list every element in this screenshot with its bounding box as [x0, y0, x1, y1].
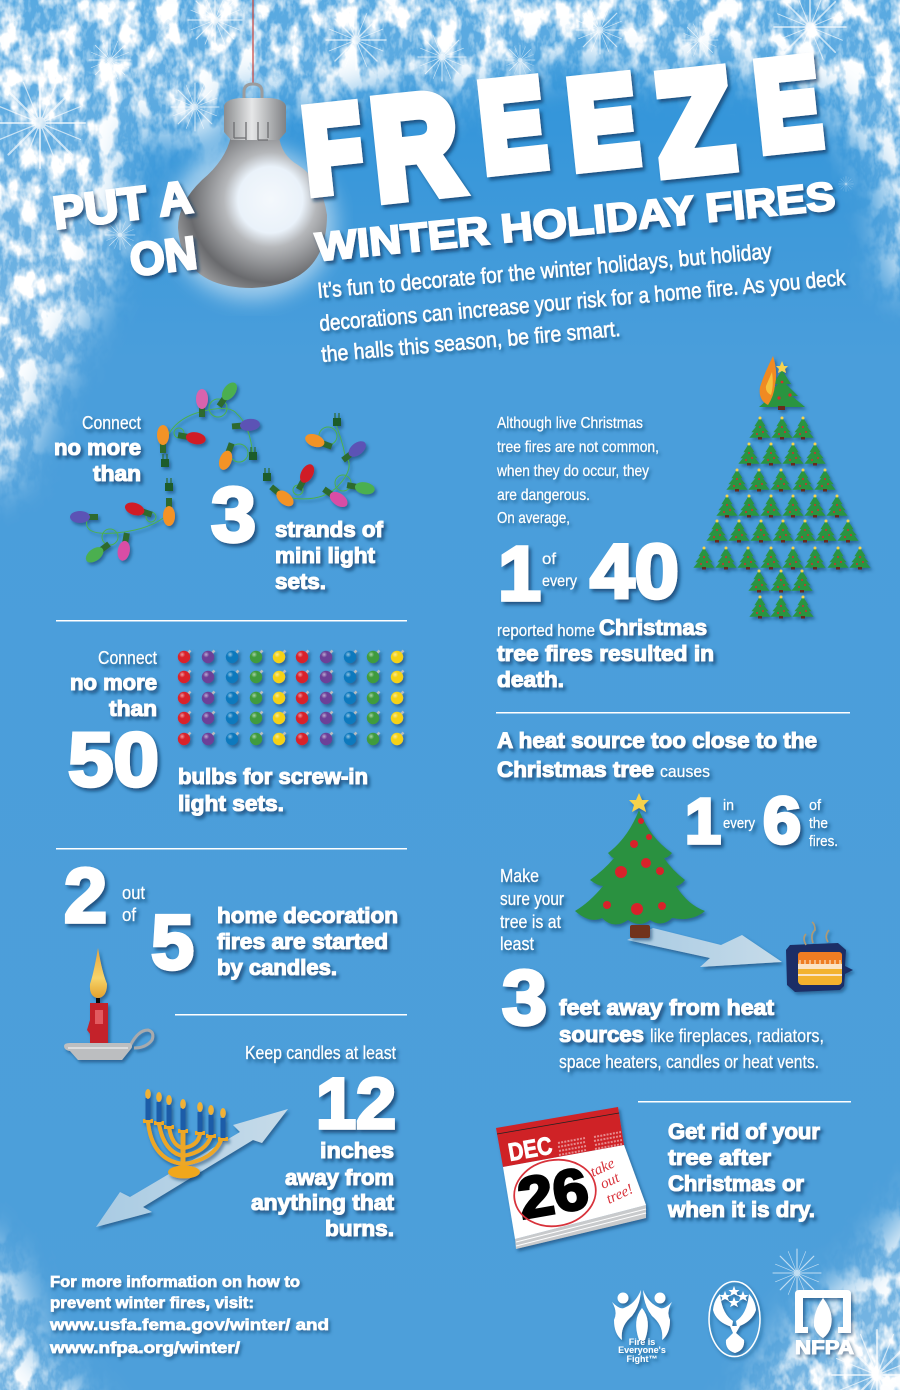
text: make sure 3 feet: Make	[500, 866, 539, 886]
text: 2 out of 5: by candles.	[217, 955, 337, 980]
text: 2 out of 5: 5	[151, 900, 194, 986]
icon: calendar dec 26: take	[588, 1155, 618, 1181]
text: 1 of every 40: every	[542, 573, 577, 590]
logo: nfpa	[795, 1290, 854, 1359]
text: connect no more than 50 bulbs: light sets.	[178, 791, 284, 816]
logo: fire is everyone's fight: Everyone's	[618, 1345, 666, 1355]
logo: fire is everyone's fight	[612, 1290, 672, 1364]
title: winter holiday fires: WINTER HOLIDAY FIRES	[314, 174, 837, 270]
text: 1 in every 6 of the fires: fires.	[809, 833, 838, 850]
text: keep candles 12 inches: burns.	[325, 1216, 394, 1241]
icon: calendar dec 26: out	[598, 1170, 623, 1193]
text: 1 in every 6 of the fires: in	[723, 797, 734, 814]
title: freeze: E	[749, 33, 826, 177]
logo: nfpa: NFPA	[795, 1338, 854, 1359]
arrow: double arrow 12 inches	[96, 1109, 288, 1227]
icon: mini light strands	[70, 380, 376, 566]
logo: fire is everyone's fight: Fight™	[626, 1354, 658, 1364]
title: freeze: F	[298, 81, 368, 218]
text: keep candles 12 inches	[245, 1043, 396, 1241]
text: get rid of your tree: Christmas or	[668, 1171, 804, 1196]
text: heat source heading: causes	[660, 762, 710, 781]
text: 1 of every 40	[497, 529, 714, 692]
icon: calendar dec 26: 26	[513, 1156, 593, 1232]
ornament	[168, 0, 336, 300]
text: 1 in every 6 of the fires: every	[723, 815, 755, 832]
text: make sure 3 feet: space heaters, candles or heat vents.	[559, 1052, 819, 1072]
text: connect no more than 50 bulbs: bulbs for screw-in	[178, 764, 368, 789]
intro text: the halls this season, be fire smart.	[320, 316, 621, 367]
title: freeze: R	[365, 63, 466, 229]
icon: calendar dec 26	[496, 1107, 646, 1249]
text: 2 out of 5: 2	[64, 853, 107, 939]
text: get rid of your tree	[667, 1119, 820, 1222]
text: 2 out of 5: of	[122, 905, 137, 925]
text: connect no more than 50 bulbs: Connect	[98, 648, 157, 668]
text: 2 out of 5: out	[122, 883, 145, 903]
text: heat source heading	[497, 728, 817, 782]
text: keep candles 12 inches: 12	[316, 1065, 396, 1144]
icon: christmas tree	[575, 793, 705, 938]
text: keep candles 12 inches: anything that	[251, 1190, 395, 1215]
text: make sure 3 feet: like fireplaces, radiators,	[650, 1026, 824, 1046]
title: freeze: E	[562, 50, 643, 194]
footer text: www.usfa.fema.gov/winter/ and	[49, 1317, 329, 1334]
text: connect no more than 3 strands: mini light	[275, 543, 376, 568]
text: keep candles 12 inches: away from	[285, 1165, 394, 1190]
logo: usfa eagle	[709, 1282, 760, 1356]
text: 1 of every 40: reported home	[497, 621, 595, 640]
text: make sure 3 feet: sure your	[500, 889, 564, 909]
text: although live christmas tree fires: when they do occur, they	[496, 463, 649, 480]
text: get rid of your tree: when it is dry.	[667, 1197, 815, 1222]
text: connect no more than 3 strands	[54, 413, 384, 594]
text: 2 out of 5: home decoration	[217, 903, 398, 928]
footer text: For more information on how to	[50, 1274, 300, 1291]
text: make sure 3 feet: least	[500, 934, 534, 954]
text: although live christmas tree fires: are dangerous.	[497, 487, 590, 504]
footer text	[49, 1274, 329, 1357]
text: get rid of your tree: tree after	[668, 1145, 771, 1170]
icon: burning tree	[759, 356, 805, 410]
intro text: It’s fun to decorate for the winter holidays, but holiday	[316, 238, 773, 303]
text: 2 out of 5: fires are started	[217, 929, 388, 954]
text: connect no more than 3 strands: strands of	[275, 517, 384, 542]
text: keep candles 12 inches: Keep candles at least	[245, 1043, 396, 1063]
text: 1 of every 40: 40	[590, 529, 679, 615]
text: connect no more than 3 strands: sets.	[275, 569, 326, 594]
icon: menorah	[143, 1089, 228, 1178]
text: 1 of every 40: tree fires resulted in	[497, 641, 714, 666]
text: make sure 3 feet: 3	[502, 955, 547, 1041]
title: freeze: E	[473, 54, 551, 198]
chart: 50 bulbs grid	[178, 650, 404, 745]
title: put a on	[50, 170, 200, 286]
arrow: tree to heater	[627, 928, 782, 967]
text: 1 in every 6 of the fires	[685, 783, 838, 857]
text: make sure 3 feet	[500, 866, 824, 1072]
text: although live christmas tree fires: Although live Christmas	[497, 415, 643, 432]
text: heat source heading: Christmas tree	[497, 757, 654, 782]
text: although live christmas tree fires: tree fires are not common,	[497, 439, 659, 456]
text: although live christmas tree fires: On average,	[497, 510, 570, 527]
text: get rid of your tree: Get rid of your	[668, 1119, 820, 1144]
text: make sure 3 feet: sources	[559, 1022, 644, 1047]
text: connect no more than 3 strands: Connect	[82, 413, 141, 433]
text: make sure 3 feet: feet away from heat	[559, 995, 775, 1020]
text: connect no more than 50 bulbs: 50	[68, 718, 159, 803]
text: 1 of every 40: 1	[498, 531, 541, 617]
intro text	[316, 238, 847, 367]
icon: space heater	[786, 922, 853, 992]
text: 1 of every 40: death.	[497, 667, 564, 692]
title: freeze	[298, 33, 826, 229]
text: 1 in every 6 of the fires: the	[809, 815, 828, 832]
text: 1 of every 40: of	[542, 551, 557, 568]
text: connect no more than 3 strands: than	[93, 461, 141, 486]
icon: candle	[64, 948, 153, 1060]
footer text: prevent winter fires, visit:	[50, 1295, 254, 1312]
text: make sure 3 feet: tree is at	[500, 912, 561, 932]
text: 2 out of 5	[64, 853, 398, 986]
icon: calendar dec 26: tree!	[604, 1181, 636, 1208]
text: connect no more than 50 bulbs: no more	[70, 670, 157, 695]
chart: 40 trees pyramid	[694, 416, 870, 618]
text: connect no more than 3 strands: 3	[211, 472, 256, 558]
text: heat source heading: A heat source too close to the	[497, 728, 817, 753]
text: 1 in every 6 of the fires: 1	[685, 785, 721, 857]
text: although live christmas tree fires	[496, 415, 659, 527]
text: 1 in every 6 of the fires: 6	[763, 783, 801, 857]
text: 1 of every 40: Christmas	[599, 615, 707, 640]
logo: fire is everyone's fight: Fire is	[629, 1337, 655, 1347]
title: put a on: PUT A	[50, 170, 195, 239]
text: connect no more than 3 strands: no more	[54, 435, 141, 460]
icon: calendar dec 26: DEC	[506, 1132, 554, 1167]
text: connect no more than 50 bulbs: than	[109, 696, 157, 721]
footer text: www.nfpa.org/winter/	[49, 1340, 241, 1357]
title: put a on: ON	[127, 226, 200, 286]
text: keep candles 12 inches: inches	[320, 1138, 394, 1163]
text: connect no more than 50 bulbs	[68, 648, 368, 816]
text: 1 in every 6 of the fires: of	[809, 797, 822, 814]
title: freeze: Z	[649, 40, 740, 205]
